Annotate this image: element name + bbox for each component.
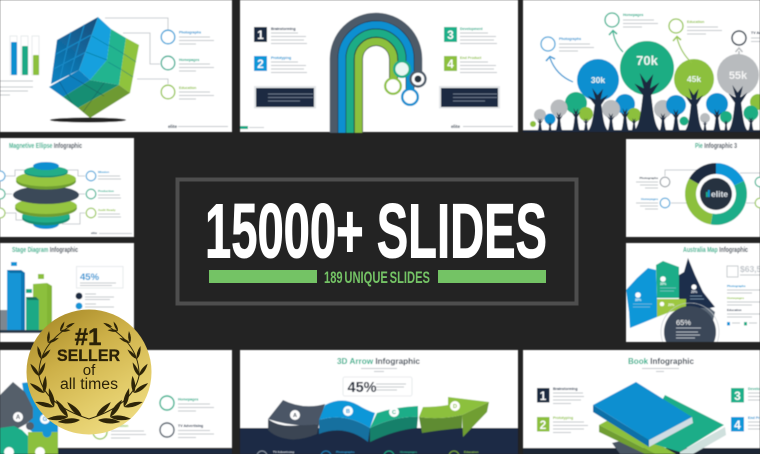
badge C: C <box>392 410 396 416</box>
number 4 <box>731 417 744 432</box>
donut center <box>700 178 732 210</box>
icon: homepages <box>161 56 175 70</box>
badge A <box>13 412 23 422</box>
footer labels: Education <box>464 450 479 454</box>
footer rings <box>257 451 459 454</box>
label text lines <box>98 176 121 217</box>
number 1: 1 <box>257 28 264 42</box>
panel: trees slide <box>523 0 760 132</box>
chart: donut <box>690 168 741 219</box>
badge D <box>450 401 460 411</box>
callout: 45%: 45% <box>80 272 100 283</box>
icon: blue dot <box>76 303 82 309</box>
book: gray <box>612 441 660 454</box>
callout left <box>254 86 316 108</box>
arrow segment B <box>319 400 375 442</box>
label: homepages: Homepages <box>623 13 643 17</box>
footer logo: elite <box>168 124 178 129</box>
callout: 45%: 45% <box>348 380 377 396</box>
callout: 45% <box>343 377 412 396</box>
footer labels: Homepages <box>400 450 417 454</box>
panel: puzzle slide <box>0 350 232 454</box>
icon: teal ring <box>605 13 619 27</box>
icon: camera dot <box>414 76 422 82</box>
title: 3D Arrow Infographic <box>337 356 420 366</box>
icon: value box <box>727 266 738 277</box>
badge B <box>343 406 353 416</box>
badge C <box>389 407 399 417</box>
badge B: B <box>346 409 350 415</box>
value: 55k: 55k <box>729 70 748 82</box>
icon: lime ring <box>93 425 107 439</box>
number 4: 4 <box>734 418 741 432</box>
medal text: all times: all times <box>60 376 118 393</box>
chart: ellipse stack <box>13 162 79 229</box>
panel: ellipse slide <box>0 138 134 237</box>
state values: 30% <box>635 298 642 302</box>
icon: teal node <box>394 61 410 77</box>
icon: right teal ring <box>755 177 760 187</box>
title: Stage Diagram Infographic <box>12 245 78 254</box>
number 3 <box>444 27 457 42</box>
green bar left <box>209 270 317 283</box>
badge G <box>40 414 50 424</box>
headline: 15000+ SLIDES <box>205 188 547 274</box>
label text lines <box>271 33 497 72</box>
footer labels: Photographs <box>336 450 355 454</box>
laurel left <box>29 321 89 425</box>
callout circle: 65%: 65% <box>676 318 691 327</box>
icon: dark ring <box>732 31 746 45</box>
labels: Photographs <box>727 284 746 288</box>
label text lines <box>636 182 658 209</box>
number 2 <box>254 56 267 71</box>
icon: homepages ring <box>160 396 174 410</box>
arrow: teal <box>609 30 623 52</box>
tree trunks <box>523 73 760 132</box>
chart: bars <box>0 262 52 333</box>
number 3: 3 <box>734 389 741 403</box>
label: prototyping: Prototyping <box>271 56 291 60</box>
number 1 <box>537 388 550 403</box>
map: states <box>626 258 715 335</box>
panel: 3D arrow slide <box>240 350 518 454</box>
callout circle: 65% <box>660 302 720 343</box>
label: photographs: Photographs <box>559 37 581 41</box>
arrow segment A <box>268 400 325 439</box>
icon: photographs <box>161 30 175 44</box>
panel: australia map slide <box>625 242 760 343</box>
number 4: 4 <box>447 57 454 71</box>
book: teal <box>640 395 726 454</box>
icon: tv ring <box>160 423 174 437</box>
label: brainstorming: Brainstorming <box>553 387 578 391</box>
state values <box>635 282 698 307</box>
number 3: 3 <box>447 28 454 42</box>
medal text: of: of <box>83 362 96 379</box>
cube shadow <box>50 118 126 122</box>
subtitle lines <box>361 368 397 372</box>
icon: gray ring <box>660 177 670 187</box>
icon: navy dot <box>76 293 82 299</box>
footer labels: TV Advertising <box>273 450 294 454</box>
navy footer band <box>240 428 518 454</box>
state values: 20% <box>691 290 698 294</box>
labels <box>98 170 116 212</box>
connector lines <box>5 170 85 224</box>
badge G: G <box>43 417 48 423</box>
badge D: D <box>453 404 457 410</box>
book: blue <box>593 382 693 447</box>
icon: cube <box>49 17 139 118</box>
icon: lime ring <box>669 19 683 33</box>
number 1 <box>254 27 267 42</box>
chart: arch bands <box>334 17 418 133</box>
state values: 30% <box>660 282 667 286</box>
footer tag <box>240 126 264 129</box>
label: end product: End Product <box>460 56 482 60</box>
subtitle lines <box>642 368 679 372</box>
badge D <box>35 447 45 454</box>
panel: stage diagram slide <box>0 243 134 342</box>
label: brainstorming: Brainstorming <box>271 27 296 31</box>
label text lines <box>111 404 214 438</box>
label: education: Education <box>179 86 196 90</box>
label text lines <box>179 37 214 99</box>
labels: Production <box>98 189 114 193</box>
small stats <box>727 322 757 326</box>
labels: Mission <box>98 170 109 174</box>
panel: book slide <box>523 350 760 454</box>
progress bars <box>0 36 39 95</box>
icons: ellipse labels <box>0 171 96 218</box>
label: education: Education <box>687 20 704 24</box>
state values: 20% <box>668 303 675 307</box>
label: education: Education <box>111 424 128 428</box>
medal text: seller: SELLER <box>57 346 120 365</box>
labels: Homepages <box>727 296 744 300</box>
connector lines <box>105 18 168 84</box>
icon: gray node <box>410 72 426 86</box>
label text lines <box>559 20 760 51</box>
label: photographs: Photographs <box>179 30 201 34</box>
label: development: Development <box>460 27 483 31</box>
connector lines <box>665 170 760 203</box>
label: homepages: Homepages <box>179 58 199 62</box>
number 2: 2 <box>257 57 264 71</box>
state icons <box>635 276 697 306</box>
label: tv advertising: TV Advertising <box>178 424 203 428</box>
label: homepages: Homepages <box>178 398 198 402</box>
footer labels <box>273 450 479 454</box>
panel: arch slide <box>240 0 518 133</box>
logo: elite: elite <box>711 189 728 199</box>
footer: elite <box>91 231 97 235</box>
footer logo: elite <box>451 124 461 129</box>
number 1: 1 <box>540 389 547 403</box>
green bar right <box>438 270 546 283</box>
footer logo <box>451 124 513 129</box>
panel: cube slide <box>0 0 232 132</box>
number 2 <box>537 417 550 432</box>
callout right <box>439 86 500 108</box>
labels: Education <box>727 308 742 312</box>
badge C <box>4 447 14 454</box>
label text lines <box>85 294 114 307</box>
value: 45k: 45k <box>687 74 701 84</box>
icon: education <box>161 85 175 99</box>
label text lines <box>553 393 760 432</box>
laurel right <box>89 321 149 425</box>
center panel frame <box>178 180 576 304</box>
arrow segment C <box>370 406 418 442</box>
icon: lime node <box>385 78 401 94</box>
arrow: lime <box>673 36 692 63</box>
label: photographs: Photographs <box>640 176 658 180</box>
chart: puzzle house <box>0 382 58 454</box>
state text lines <box>633 288 704 307</box>
number 2: 2 <box>540 418 547 432</box>
arrow: gray <box>736 48 742 55</box>
value: 70k: 70k <box>636 53 659 68</box>
medal: #1 seller <box>26 310 152 434</box>
title: Australia Map Infographic <box>683 245 748 254</box>
badge A: A <box>16 415 21 421</box>
panel: pie slide <box>626 139 760 237</box>
arrow: blue <box>546 56 573 82</box>
icon: blue node <box>402 89 418 105</box>
footer logo <box>168 124 228 129</box>
label: homepages: Homepages <box>641 197 658 201</box>
book: lime <box>599 418 676 454</box>
badge A: A <box>293 413 297 419</box>
labels <box>727 284 746 312</box>
chart: tree bubbles <box>530 41 760 127</box>
medal text: #1: #1 <box>75 324 101 351</box>
number 3 <box>731 388 744 403</box>
labels: Audit Ready <box>98 208 116 212</box>
arrow segment D <box>419 397 489 437</box>
label: prototyping: Prototyping <box>553 416 573 420</box>
value: 30k: 30k <box>591 75 605 85</box>
label text lines <box>727 275 760 317</box>
number 4 <box>444 56 457 71</box>
icon: blue ring <box>541 37 555 51</box>
subheading: 189 UNIQUE SLIDES <box>324 269 430 287</box>
title: Magnetive Ellipse Infographic <box>9 141 82 150</box>
title: Pie Infographic 3 <box>695 141 737 150</box>
icon: blue ring <box>660 198 670 208</box>
title: Book Infographic <box>628 356 694 366</box>
badge A <box>290 410 300 420</box>
icon: right lime ring <box>755 198 760 208</box>
